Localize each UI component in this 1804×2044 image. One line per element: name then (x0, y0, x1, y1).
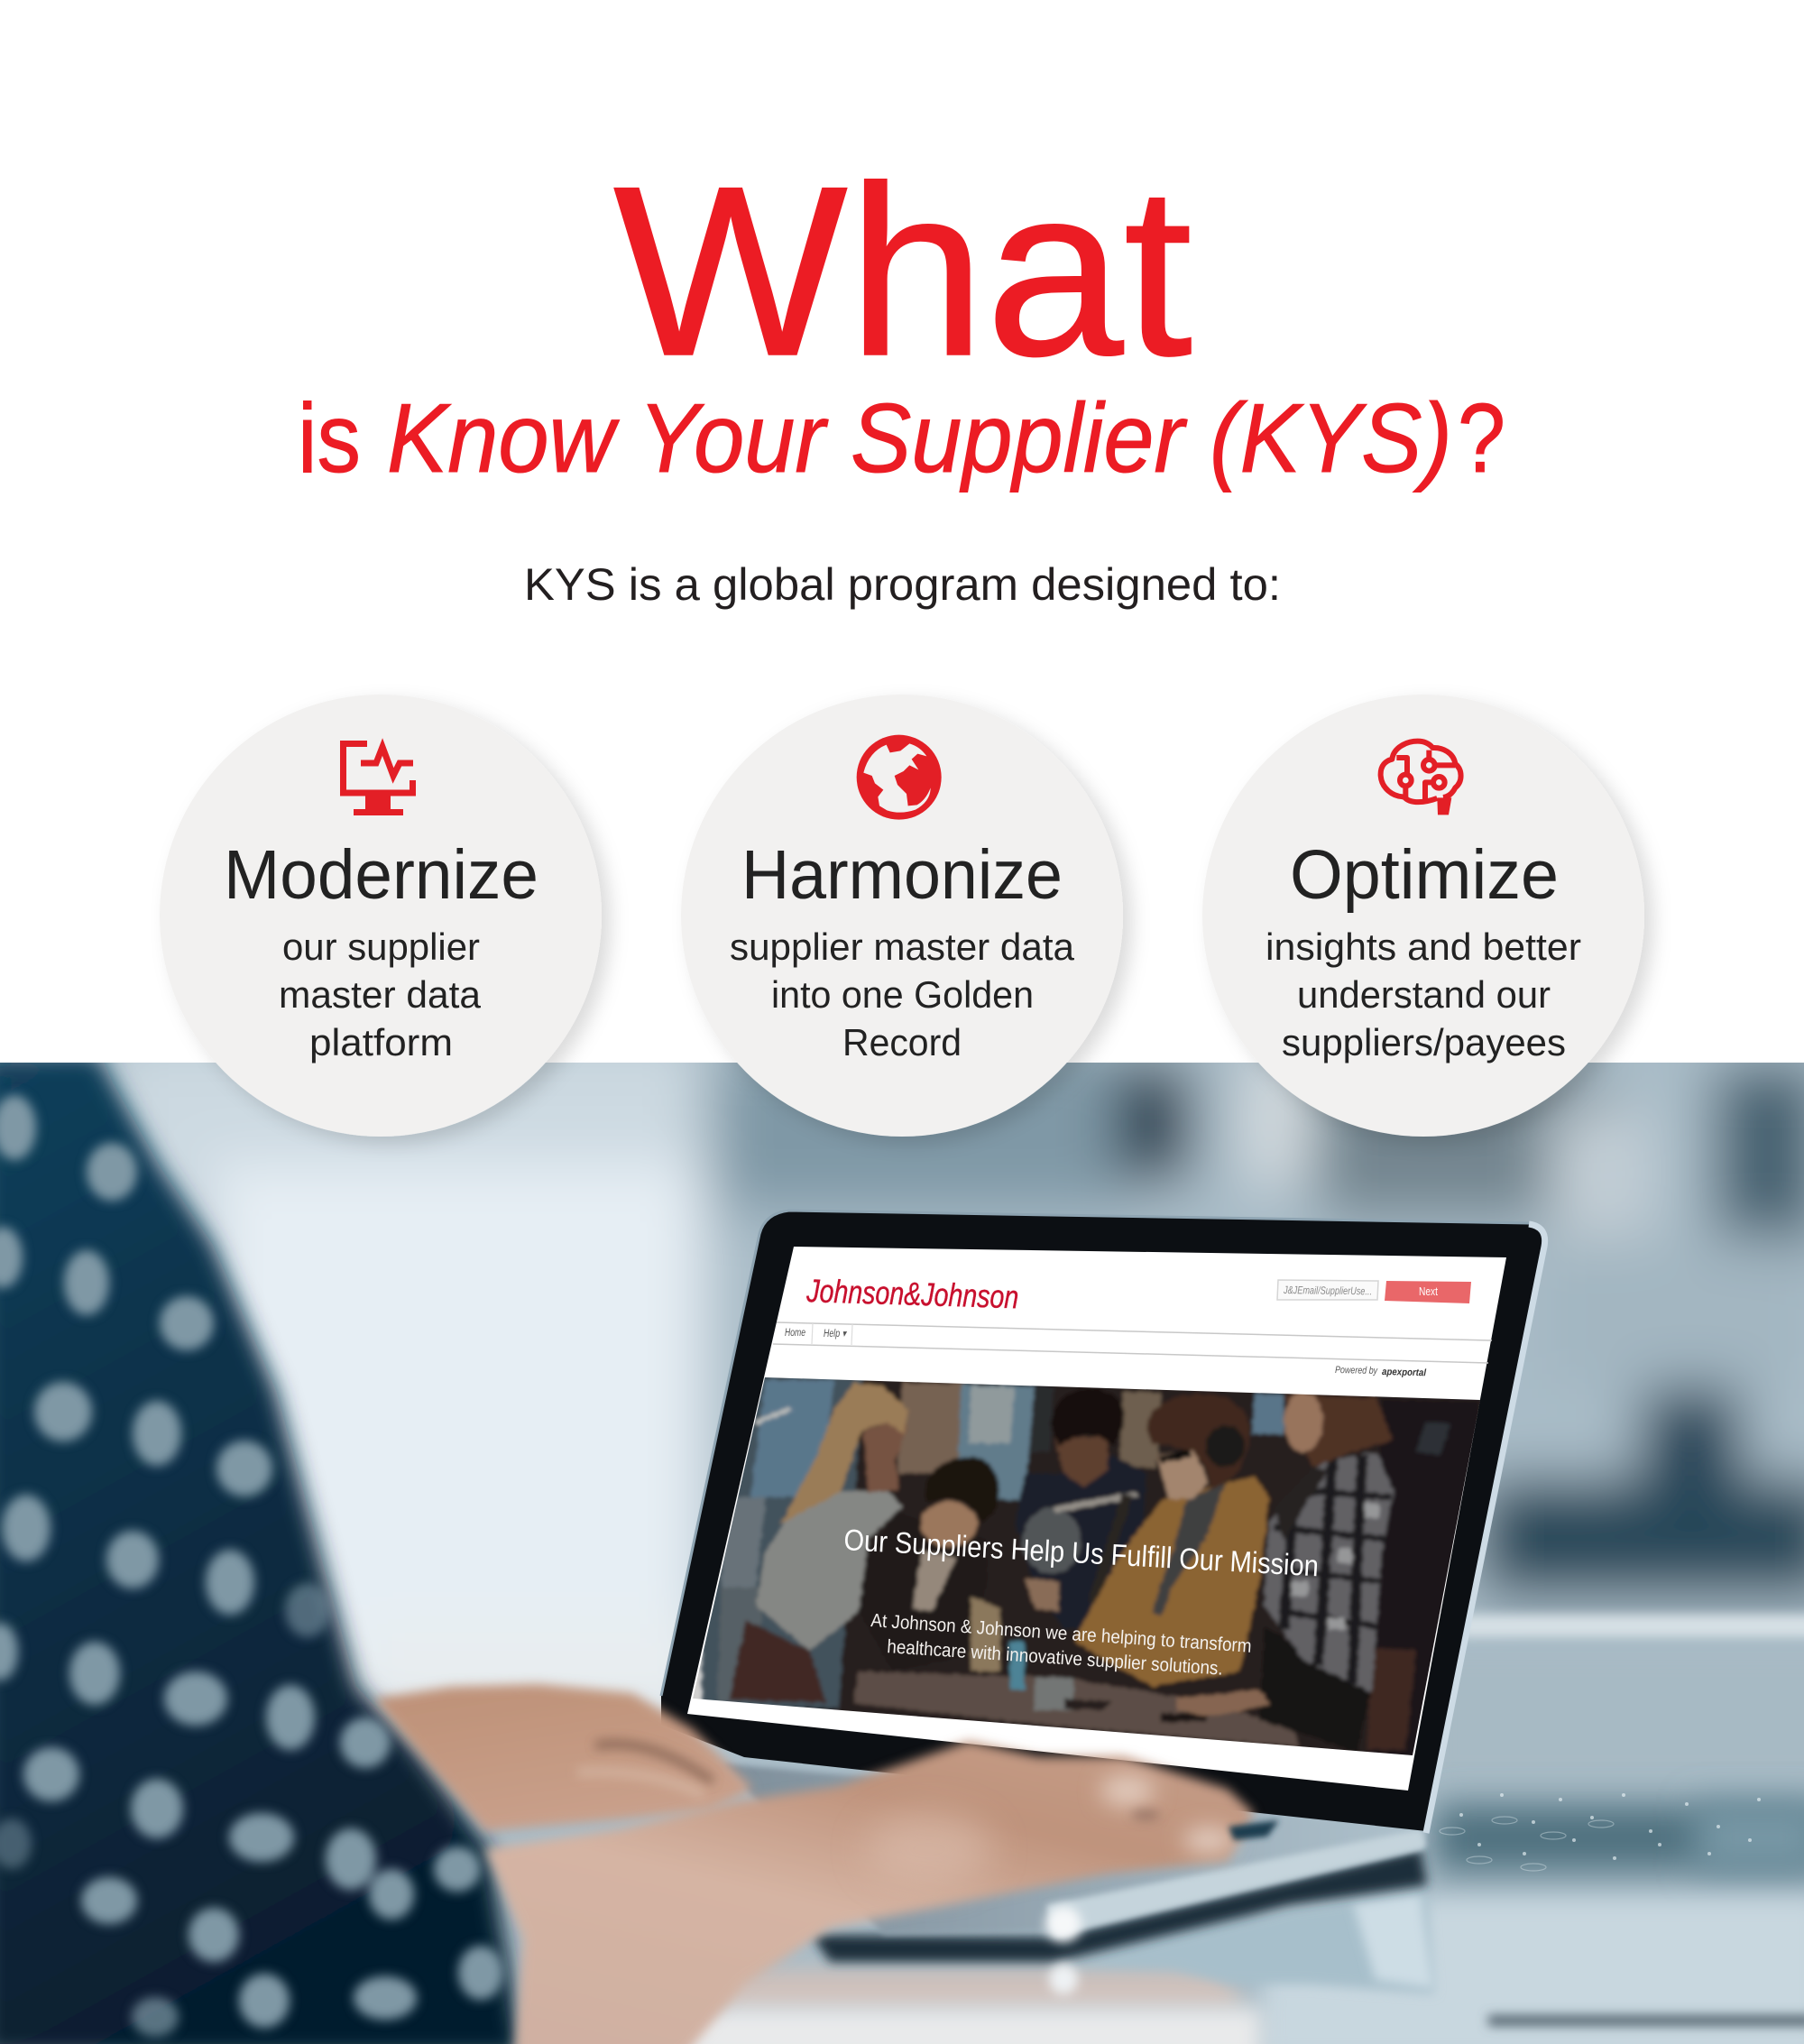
laptop lid (661, 1211, 1545, 1833)
body text: Record (842, 1021, 962, 1063)
woman with blonde hair (729, 1383, 908, 1703)
body text: understand our (1297, 973, 1551, 1016)
icon: globe (857, 735, 942, 820)
heading: Modernize (224, 836, 538, 914)
chair (1367, 1647, 1416, 1750)
subtitle: is Know Your Supplier (KYS)?: Know Your Supplier (KYS) (387, 383, 1452, 493)
next button: Next (1419, 1284, 1438, 1298)
intro text: KYS is a global program designed to: (524, 559, 1281, 610)
page logo: Johnson&Johnson (805, 1272, 1019, 1315)
next button (1385, 1281, 1471, 1303)
table dots pattern (1459, 1793, 1761, 1860)
body text: supplier master data (730, 925, 1075, 968)
dark key near fingertip (1229, 1820, 1279, 1840)
body text: into one Golden (771, 973, 1034, 1016)
panel: Modernize (160, 695, 602, 1137)
far hand on keyboard (374, 1684, 753, 1831)
man with curly hair (859, 1457, 1000, 1671)
body text: suppliers/payees (1282, 1021, 1566, 1063)
body text (730, 925, 1075, 1063)
blurred office background (0, 992, 1804, 2044)
hero body text: healthcare with innovative supplier solutions. (887, 1636, 1223, 1680)
title: What: What (613, 135, 1193, 406)
table surface (622, 1615, 1804, 2044)
heading: Optimize (1290, 836, 1559, 914)
woman in yellow coat (1073, 1395, 1269, 1687)
woman in plaid shirt (1176, 1392, 1394, 1753)
icon: monitor with pulse (343, 743, 413, 815)
body text: insights and better (1266, 925, 1581, 968)
photo: person typing on laptop (0, 992, 1804, 2044)
powered by (1335, 1366, 1427, 1377)
body text (279, 925, 482, 1063)
hero photo of suppliers (693, 1371, 1504, 1773)
back wall (702, 1377, 863, 1708)
panel: Optimize (1202, 695, 1644, 1137)
nav bar: Home (785, 1328, 805, 1339)
nav bar (773, 1322, 1492, 1363)
desk lamp (1022, 1495, 1137, 1602)
subtitle: is Know Your Supplier (KYS)?: ? (1458, 383, 1505, 493)
email input (1277, 1280, 1378, 1300)
heading: Harmonize (741, 836, 1063, 914)
email input: J&JEmail/SupplierUse... (1283, 1284, 1372, 1297)
laptop screen: web page (687, 1247, 1506, 1791)
body text: our supplier (282, 925, 480, 968)
body text (1266, 925, 1581, 1063)
hero body text (870, 1610, 1252, 1680)
panel: Harmonize (681, 695, 1123, 1137)
nav bar: Help ▾ (824, 1329, 848, 1340)
laptop deck (722, 1763, 1434, 1994)
powered by: apexportal (1382, 1367, 1427, 1378)
sleeve with polka dots (0, 1055, 523, 2044)
body text: master data (279, 973, 482, 1016)
hero body text: At Johnson & Johnson we are helping to transform (870, 1610, 1252, 1657)
near hand on keyboard (485, 1741, 1254, 2044)
subtitle: is Know Your Supplier (KYS)?: is (298, 383, 361, 493)
hero headline: Our Suppliers Help Us Fulfill Our Mission (843, 1523, 1320, 1582)
body text: platform (309, 1021, 453, 1063)
icon: circuit brain (1381, 741, 1461, 815)
table (853, 1671, 1299, 1746)
powered by: Powered by (1335, 1365, 1378, 1376)
standing man (1015, 1387, 1147, 1629)
